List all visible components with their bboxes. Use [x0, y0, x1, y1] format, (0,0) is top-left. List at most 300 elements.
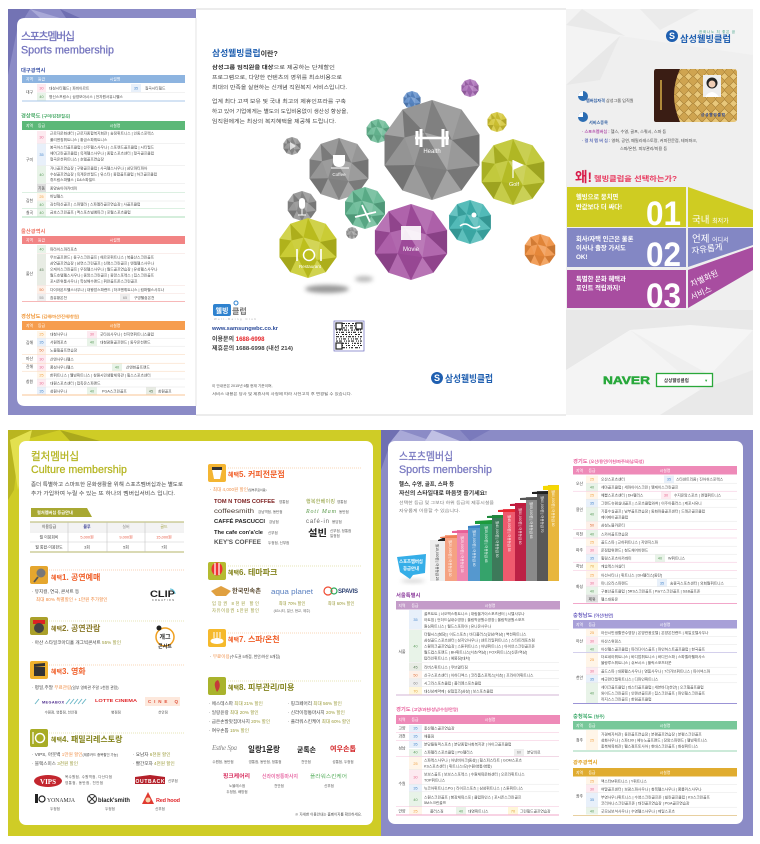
benefit 6: theme park: (63시티, 일산, 현교, 제주) [274, 608, 310, 613]
icon: balloon [208, 562, 226, 580]
coffee brand logos: 행복한베이킹 [306, 498, 335, 505]
benefit 4: family restaurant: 목수원점, 수원역점, 다산다점 [65, 774, 112, 779]
benefit 8: skin and beauty: · 플라워스킨케어 최대 60% 할인 [288, 718, 350, 725]
table: Gyeongbuk [21, 112, 185, 217]
coffee brand logos: 신부점 [268, 530, 278, 535]
table: Ulsan: 울산 [26, 271, 33, 276]
benefit 3: movies: 혜택3. 영화 [51, 666, 86, 676]
table: Chungbuk: 시설명 [660, 723, 671, 728]
table: Chungnam: 골드스파 | 대몽헬스사우나 | 명품사우나 | 7리가브휘트니스 | 파이넥스파 [601, 668, 711, 674]
heading: sports membership: Sports membership [399, 464, 492, 476]
sphere: Movie: Movie [403, 247, 420, 253]
benefit 8: skin and beauty: · 여우손톱 15% 할인 [209, 727, 249, 734]
text block: sports intro [399, 480, 494, 514]
table: culture grades: 월 이용회비 [40, 534, 59, 540]
logo: CLIP: CREATION [152, 599, 174, 602]
table: Gyeonggi south-east: 25 [590, 540, 594, 544]
table: Chungnam: 35 [590, 678, 594, 682]
benefit 7: spa: · 무료이용(수도권 5개점, 천안/아산 5개점) [210, 653, 281, 660]
table: Daegu [21, 66, 185, 101]
beauty brand logos: Esthe Spa [211, 744, 238, 752]
table: Ulsan: 월드호텔헬스사우나 | 중앙스크린골프 | 중앙스포렉스 | 칩스크린골프 [50, 272, 155, 278]
table: Ulsan: 무브골프랜드 | 동구스크린골프 | 헤르포휘트니스 | 북울산스크린골프 [50, 254, 155, 260]
reason 03: 서비스 [689, 285, 713, 302]
reason 01 [567, 187, 753, 233]
table: Gyeongnam: 진해 [26, 364, 33, 369]
table: Seoul: 등급 [412, 603, 419, 608]
ribbon: grade guide [31, 508, 92, 517]
membership card: 삼성웰빙클럽 [701, 112, 725, 117]
table: Gyeonggi south-east: 40 [658, 556, 662, 560]
coffee brand logos: 일정점 [330, 533, 340, 538]
table: Daegu: 명신스프링스 | 삼영모아시스 | 전자원서유니헬스 [49, 94, 123, 99]
table: Daegu: 시설명 [110, 76, 121, 82]
coffee brand logos: 두정점, 신부점 [268, 540, 289, 545]
benefit 7: spa: 혜택7. 스파/온천 [228, 634, 280, 644]
logo: well-being club [213, 301, 256, 321]
table: Gyeonggi south-east: 그랜드슈럼실내골프 | 스포츠클럽와쳐 | 이주아플러스 | 제포시유니 [601, 500, 702, 506]
table: Gyeongnam: 창원 [26, 379, 33, 384]
table: Gyeongbuk: 금호스크린골프 | 맥스포츠빌앵파크 | 포월스포츠클럽 [50, 210, 131, 214]
footnote: 이 안내문은 2015년 6월 현재 기준이며, [212, 383, 273, 388]
table: Gyeonggi south-west: 분당올림픽스포츠 | 분당종합사회복지관 | 아이고골프클럽 [424, 742, 511, 746]
table: Gyeongbuk: 김천혁신골프 | 스파엘라 | 스파엘라골프연습장 | 사골프클럽 [50, 202, 140, 206]
stair bar chart: membership grades: 월25,000원 | 이용등급 35 [460, 536, 465, 573]
table: Gyeongnam: 30 [39, 366, 44, 370]
table: Ulsan: 50 [39, 288, 44, 292]
coffee brand logos [214, 498, 351, 546]
sphere: orange [525, 234, 555, 266]
table: Gyeonggi south-west: 분당의료 [527, 750, 541, 754]
table: Gyeonggi south-east: 25 [590, 494, 594, 498]
heading: culture membership [31, 450, 127, 476]
text block: description: 임직원에게는 최상의 복지혜택을 제공해 드립니다. [212, 117, 336, 125]
coffee brand logos: 설빈 [308, 527, 327, 538]
sphere: Health [384, 100, 480, 200]
table: Gyeonggi south-west: 40 [413, 750, 418, 754]
table: culture grades: 7회 [161, 544, 167, 550]
table: Chungbuk: 지역 [576, 723, 583, 728]
table: Chungnam: 등급 [588, 622, 596, 627]
table: Gyeongbuk: 근로자문화센터 | 근로자종합복지회관 | 송정휘트니스 | 인동스포렉스 [50, 130, 155, 136]
table: Chungbuk: 등급 [588, 723, 596, 728]
table: Gyeonggi south-east: 25 [590, 574, 594, 578]
table: Gyeongnam: 30 [39, 358, 44, 362]
heading: culture membership: Culture membership [31, 464, 127, 476]
sphere: Golf: Golf [509, 182, 520, 188]
table: Daegu: 지역 [26, 76, 33, 82]
beauty brand logos: 성통점, 두정점 [332, 759, 354, 764]
icon: hot spring [208, 629, 226, 647]
benefit 3: movies: 수원점, 영통점, 천안점 [45, 710, 77, 714]
table: Chungbuk: 충청북도 (청주) [573, 712, 605, 720]
text block: description [212, 63, 348, 125]
table: Gyeonggi south-east: 화성 [576, 584, 583, 589]
table: Gwangju: 광주광역시 [573, 758, 597, 766]
table: Gwangju: 광주 [576, 794, 583, 798]
heading: why choose [575, 169, 677, 185]
benefit 8: skin and beauty: · 핑크페어리 최대 56% 할인 [288, 700, 342, 707]
text block: sports intro: 자유롭게 이용할 수 있습니다. [399, 507, 460, 514]
table: Daegu: 등급 [38, 76, 45, 82]
icon: eligibility [578, 91, 588, 101]
footnote: 서비스 내용은 당사 및 제휴사의 사정에 따라 사전고지 후 변경될 수 있습니다. [212, 391, 352, 396]
text block: eligibility and services: · 컬 처 멤 버 십 : 영화, 공연, 패밀리레스토랑, 커피전문점, 테마파크, [582, 137, 697, 143]
table: Gyeonggi south-west: 애플짐 [424, 734, 434, 738]
table: Chungbuk: 성화사우나 | 스파199 | 에뉴노골프랜드 | 장양스파랜드 | 헬빙휘트니스 [601, 738, 708, 742]
coffee brand logos: 강남점 [269, 519, 279, 524]
beauty brand logos: 천안점 [301, 759, 311, 764]
table: Chungnam: 아산 [576, 638, 583, 644]
table: Gyeongbuk: 풀리엔칭휘트니스 | 황금스파휘트니스 [50, 137, 108, 142]
text block: description: 업계 최다 고객 보유 및 국내 최고의 제휴인프라를 구축 [212, 97, 346, 105]
table: Ulsan: 55 [39, 296, 44, 300]
panel: membership cover right [566, 9, 753, 415]
benefit 6: theme park: 최대 70% 할인 [279, 600, 305, 607]
table: Daegu: 35 [134, 86, 138, 90]
table: Chungnam: 아산스위밍스 [601, 638, 622, 644]
benefit 3: movies: · 평일,주말 무료관람(일부 영화관 주말 1천원 관람) [32, 684, 119, 691]
table: Chungnam: 25 [590, 658, 594, 662]
logo: CLIP: CLIP [150, 589, 176, 600]
table: Gwangju: 코리아나스크린골프존 | 태전골프연습장 | PGA골프연습장 [601, 800, 690, 806]
benefit 4: family restaurant: 신부점 [155, 806, 165, 811]
table: Gyeongnam: 산엔사우나헬스 [50, 356, 74, 362]
logo: Megabox: MEGABOX [42, 700, 64, 704]
benefit 4: family restaurant: · VIPS, 아웃백 1만원 할인(제휴카드 중복할인 가능) [32, 751, 118, 758]
table: Gyeongnam: 30 [90, 332, 94, 336]
table: Gyeongnam: 지역 [26, 323, 33, 328]
logo: Megabox [35, 699, 86, 704]
table: Seoul: 70 [413, 690, 418, 694]
logo: Samsung Well-being Club: 삼성웰빙클럽 [445, 373, 493, 385]
table: culture grades: 월 통합-이용한도 [35, 544, 63, 550]
panel: sports membership right [381, 430, 753, 836]
table: Seoul: 아트짐 | 언더드실내수영장 | 올림픽공원수영장 | 올림픽공원스포츠 [424, 617, 525, 622]
table: Daegu: 대성시티헬드 | 파비아르트 [49, 86, 90, 90]
table: Gyeongbuk: 기동 [38, 186, 45, 190]
table: Gyeongnam: 한휘트니스 | 웰빙휘트니스 | 창원시민생활체육관 | 힐스스포츠센터 [50, 372, 151, 378]
table: Gyeonggi south-east: 30 [664, 494, 668, 498]
table: Gyeonggi south-west: 35 [413, 742, 418, 746]
table: Gyeonggi south-east: 35 [660, 582, 664, 586]
logo: Samsung Well-being Club: S [434, 373, 440, 383]
coffee brand logos: coffeesmith [214, 508, 254, 515]
table: Chungnam: 세미크골프클럽 | 데스티골프클럽 | 세븐바디[천안] | 오크힐골프클럽 [601, 684, 704, 690]
icon: coffee cup [208, 464, 226, 482]
table: Seoul: 신구스포츠센터 | 이하디엑스 | 코리폼스포렉스[서초] | 프라이머휘트니스 [424, 672, 534, 678]
benefit 4: family restaurant: · 요남자 6천원 할인 [133, 751, 171, 758]
table: Seoul: 리버스휘트니스 | 쿠브멀티짐 [424, 664, 468, 670]
table: Gyeonggi south-east [573, 457, 737, 604]
table: Chungbuk [573, 712, 737, 751]
table: Ulsan [21, 227, 185, 302]
table: Gyeonggi south-east: 캐슬렉스아실터 [601, 564, 625, 568]
table: Ulsan: 포시즌위통사우나 | 학성해수랜드 | 휘만골프존스크린골프 [50, 278, 138, 284]
beauty brand logos: 신부점 [324, 783, 334, 788]
table: Chungnam: 블랑루스휘트니스 | 쉬브시스 | 플릭스포츠타운 [601, 660, 672, 665]
table: Gyeonggi south-east: 등급 [588, 468, 596, 473]
table: Gyeongnam: 풍성사우나헬스 [50, 364, 74, 370]
logo: Outback [135, 775, 165, 785]
contact information: www.samsungwbc.co.kr [211, 326, 279, 332]
table: Gyeongbuk: 35 [39, 153, 44, 157]
table: Gwangju: 등급 [588, 770, 596, 775]
benefit 4: family restaurant [30, 729, 184, 811]
search box: NAVER [603, 374, 712, 387]
coffee brand logos: 봉담점 [332, 519, 342, 524]
logo: Samsung Well-being Club: 삼성웰빙클럽 [680, 33, 731, 44]
table: culture grades: 5회 [123, 544, 129, 550]
icon: services [578, 112, 588, 122]
table: Gwangju: 30 [590, 788, 594, 792]
table: culture grades [30, 522, 184, 552]
logo: Korean folk village: 한국민속촌 [232, 587, 261, 595]
text block: description: 하고 있어 기업에게는 별도의 도입비용없이 생산성 향상을, [212, 107, 348, 115]
table: Gyeongbuk: 김천 [26, 198, 33, 203]
table: Gyeongbuk: 종양숨아마카데미 [50, 186, 77, 190]
table: Gyeongbuk: 경상북도 (구미/김천/칠곡) [21, 112, 71, 120]
sphere: Restaurant [280, 218, 336, 278]
text block: culture intro [31, 480, 183, 497]
logo: Samsung Well-being Club [431, 372, 493, 385]
table: Gyeonggi south-west: 스원스크린골프 | 항장체육스포 | 클럽파인스 | 포시즌스크린골프 [424, 794, 522, 800]
heading: sports membership: 스포츠멤버십 [21, 30, 75, 43]
stair bar chart: membership grades: 월60,000원 | 이용등급 70 [540, 496, 545, 533]
table: Seoul: 50 [413, 674, 418, 678]
heading: sports membership: Sports membership [21, 44, 114, 56]
reason 03: 포인트 적립까지! [576, 283, 620, 292]
logo: black smith [88, 794, 130, 804]
text block: eligibility and services: 서비스종목 [589, 119, 608, 125]
table: Gyeonggi south-east: 40 [590, 512, 594, 516]
benefit 1: performance booking: 최대 80% 특별할인 + 1만원 추가할인 [36, 596, 108, 603]
table: Gyeonggi south-east: 50 [590, 524, 594, 528]
beauty brand logos: 천안점 [274, 783, 284, 788]
table: Gyeonggi south-west: 5M스크린골프 [424, 800, 447, 805]
contact information [211, 326, 293, 352]
table: Seoul [396, 591, 560, 695]
table: Gyeonggi south-east: W휘트니스 [668, 556, 686, 560]
table: Chungbuk: 25 [590, 738, 594, 742]
table: Chungnam: 까지스스크린골프 | 한림골프클럽 [601, 696, 652, 702]
table: Seoul: 골프트트 | 너오맥스휘트니스 | 대림올가이스포츠센터 | 시텔사우나 [424, 611, 525, 616]
benefit 4: family restaurant: 신부점 [168, 778, 178, 783]
text block: culture intro: 추가 가입하여 누릴 수 있는 또 하나의 멤버십서비스 입니다. [31, 489, 175, 497]
reason 01: 헬빙으로 뭉치면 [576, 192, 619, 201]
logo: Korean folk village [211, 586, 261, 596]
logo: Outback: OUTBACK [136, 779, 165, 785]
coffee brand logos: 영통점 [279, 499, 289, 504]
reason 01: 국내 최저가 [692, 215, 729, 226]
table: Gyeongnam: 50 [39, 348, 44, 352]
benefit 3: movies [30, 661, 184, 714]
table: Ulsan: 오케이스크린골프 | 우정헬스사우나 | 월드골프연습장 | 유성헬스사우나 [50, 266, 158, 272]
table: Gyeonggi south-east: 30 [590, 548, 594, 552]
table: Gyeonggi south-east: 30 [590, 582, 594, 586]
table: Gyeonggi south-east: 예쁨스포츠센터 | DH헬리스 [601, 492, 644, 498]
beauty brand logos: 수원점, 동탄점 [212, 759, 234, 764]
table: Ulsan: 다이아몬드헬스사우나 | 대왕암스파랜드 | 하크벤휘트니스 | 컴퍼헬스사우나 [50, 287, 165, 292]
heading: sports membership [399, 450, 492, 476]
table: Gyeonggi south-east: 힐링스포츠아카데미 [601, 556, 632, 560]
table: Gyeongbuk: 바닐헬스 [50, 194, 64, 198]
sphere: Coffee [310, 138, 368, 200]
coffee brand logos: KEY'S COFFEE [214, 540, 261, 546]
callout: grade guide: 스포츠멤버십 [399, 558, 423, 565]
table: Seoul: 40 [413, 644, 418, 648]
table: culture grades: 5,000원 [80, 534, 94, 540]
callout: grade guide [397, 554, 426, 582]
heading: why choose: 헬빙클럽을 선택하는가? [594, 174, 677, 183]
table: Gyeongnam: 40 [90, 390, 94, 394]
table: Gyeongbuk: 30 [39, 136, 44, 140]
heading: sports membership [21, 30, 114, 56]
logo: VIPS [34, 775, 62, 787]
beauty brand logos: 영통점, 동탄점, 정통점 [249, 759, 281, 764]
beauty brand logos: 굳톡손 [297, 746, 317, 754]
heading: why choose: 왜! [575, 169, 592, 185]
table: Ulsan: 구영헬쉼온천 [134, 295, 155, 300]
table: Gyeongnam: 시설명 [110, 323, 121, 328]
table: Gyeonggi south-west: 안양 [398, 808, 406, 814]
icon: clapperboard [30, 661, 48, 679]
table: Gyeonggi south-east: 스카이골프연습장 [601, 532, 629, 536]
table: Ulsan: 시설명 [110, 238, 121, 242]
table: Chungnam: 더르네아휘트니스 | 바디업휘트니스 | 바디인스파 | 스파엘라헬마사스 [601, 654, 706, 659]
table: Gwangju: 35 [590, 798, 594, 802]
reason 02: 언제 어디서 [692, 233, 729, 245]
heading: culture membership: 컬처멤버십 [31, 450, 79, 463]
text block: description: 프로그램으로, 다양한 컨텐츠의 영위를 최소비용으로 [212, 73, 342, 81]
sphere: Coffee: Coffee [332, 172, 346, 177]
sphere: Swim [449, 200, 491, 244]
table: Gyeonggi south-east: 파주 [576, 548, 583, 552]
table: Seoul: 지역 [398, 603, 406, 608]
table: Gyeonggi south-east: 시설명 [660, 468, 671, 473]
table: Gyeonggi south-west: 그린힐드골프연습장 [520, 808, 551, 814]
beauty brand logos: 노블레스점 [229, 783, 245, 788]
table: Gyeongbuk: 지역 [26, 123, 33, 128]
table: Chungnam: 아산시민생활관수영장 | 온양관광호텔 | 온양온천랜드 | 제일호텔사우나 [601, 630, 709, 635]
table: culture grades: 9,000원 [119, 534, 133, 540]
beauty brand logos: 플라워스킨케어 [310, 773, 347, 780]
logo: gag concert: 개그 [159, 633, 171, 641]
table: Gyeonggi south-east: 40 [590, 590, 594, 594]
coffee brand logos: The cafe con'a'cle [214, 530, 263, 536]
icon: microphone [30, 566, 48, 584]
table: Gyeonggi south-east: 25 [590, 478, 594, 482]
stair bar chart: membership grades: 월20,000원 | 이용등급 30 [448, 540, 453, 577]
benefit 4: family restaurant: · 빨간모자 4천원 할인 [133, 760, 175, 767]
table: Chungnam: 25 [590, 631, 594, 635]
table: Gyeongnam: PGA스크린골프 [102, 388, 127, 394]
table: Gyeongbuk: 에머고린골프클럽 | 옥계헬스사우나 | 종합스포츠센터 | 형곡골프클럽 [50, 150, 154, 156]
table: Gyeonggi south-west: 25 [413, 762, 418, 766]
table: Gyeongbuk: 40 [39, 203, 44, 207]
beauty brand logos: 핑크케어리 [223, 772, 250, 780]
text block: eligibility and services [578, 91, 697, 151]
coffee brand logos: café-in [306, 519, 329, 525]
benefit 7: spa [208, 629, 361, 660]
table: Gyeonggi south-east: 지역 [576, 468, 583, 473]
table: Gyeonggi south-west: 70 [511, 810, 515, 814]
logo: well-being club: 클럽 [232, 306, 247, 316]
table: Seoul: 대신상제약제 | 삼협휴즈[삼성] | 보스포츠클럽 [424, 688, 493, 694]
table: Chungnam: 아산헬스골프클럽 | 파라다이스골프 | 파인허스트골프클럽 | 한국골프 [601, 646, 706, 652]
benefit 8: skin and beauty: · 에스테스파 최대 21% 할인 [209, 700, 263, 707]
table: Gyeongbuk: 40 [39, 173, 44, 177]
benefit 4: family restaurant: 혜택4. 패밀리레스토랑 [51, 734, 123, 744]
search box: NAVER: ▾ [705, 378, 708, 383]
table: Gyeongbuk: 시설명 [110, 123, 121, 128]
table: Gwangju: 지역 [576, 770, 583, 775]
table: Gyeonggi south-west: 40 [413, 798, 418, 802]
benefit 8: skin and beauty: 혜택8. 피부관리/미용 [228, 682, 295, 692]
logo: well-being club: Well-Being Club [214, 317, 256, 321]
sphere: Golf [482, 139, 544, 205]
stair bar chart: membership grades [430, 485, 559, 581]
coffee brand logos: 영통점 [337, 499, 347, 504]
benefit 1: performance booking [30, 566, 184, 603]
sphere: microphone [288, 191, 316, 221]
table: Gyeongnam: 성원사우나 [50, 388, 68, 394]
table: Gyeonggi south-east: 35 [590, 502, 594, 506]
logo: VIPS: VIPS [40, 778, 56, 786]
table: Gyeonggi south-west: KS스포츠센터 | 휘트니스I모(수원/영통/영통) [424, 764, 492, 768]
logo: Samsung Well-being Club: S [669, 31, 675, 41]
table: Gyeonggi south-west: 성남 [398, 746, 406, 750]
table: Chungnam: 30 [590, 670, 594, 674]
table: Seoul: 원심휘트니스 | 월드스포피아 | 유니온사우나 [424, 624, 492, 628]
logo: Cine-Q [145, 697, 180, 706]
beauty brand logos: 여우손톱 [330, 744, 357, 753]
table: Gyeongnam: 산엔헌골프랜드 [126, 364, 150, 370]
benefit 5: coffee shops: 혜택5. 커피전문점 [228, 469, 285, 479]
table: Gyeonggi south-west: 대명휘트니스 [468, 808, 489, 814]
membership card [654, 69, 737, 122]
contact information: 제휴문의 1688-6998 (내선 214) [212, 344, 293, 352]
logo: Samsung Well-being Club [666, 29, 736, 44]
table: Seoul: 35 [413, 618, 418, 622]
heading: sports membership: 스포츠멤버십 [399, 450, 453, 463]
reason 02: 02 [646, 236, 681, 274]
table: Gwangju: 25 [590, 780, 594, 784]
reason 02: 회사/자택 인근은 물론 [576, 234, 634, 243]
icon: leaf [208, 677, 226, 695]
sphere cluster: services [280, 79, 555, 293]
table: Gyeongnam: 서원레포츠 [50, 340, 68, 344]
coffee brand logos: 동탄점 [339, 509, 349, 514]
table: culture grades: 15,000원 [156, 534, 172, 540]
sphere: Health: Health [423, 149, 441, 155]
text block: description: 삼성그룹 임직원을 대상 으로 제공하는 단체할인 [212, 63, 335, 71]
table: culture grades: 블루 [83, 524, 91, 529]
logo: Spavis [324, 587, 358, 595]
search box: NAVER: 삼성웰빙클럽 [664, 377, 689, 384]
table: Chungbuk: 가경제자치관 | 동민골프연습장 | 분평골프연습장 | 분평스크린골프 [601, 732, 702, 736]
title: what is the club: 삼성웰빙클럽이란? [212, 47, 278, 58]
table: Seoul: 시설명 [485, 603, 496, 608]
table: Gyeonggi south-west: 고양 [398, 726, 406, 730]
table: Gyeonggi south-east: 수지문암스포츠 | 엔젤휘트니스 [674, 492, 722, 498]
stair bar chart: membership grades: 월15,000원 | 이용등급 25 [435, 544, 440, 581]
table: Gyeonggi south-west: 충산헬스골프연습장 [424, 726, 455, 730]
table: Ulsan: 삼연골프연습장 | 삼연스크린골프 | 신명스크린골프 | 엔젤헬스사우나 [50, 260, 155, 266]
table: Gyeonggi south-west: 등급 [412, 717, 419, 722]
reason 03 [567, 247, 753, 315]
logo: gag concert: 콘서트 [158, 643, 172, 650]
